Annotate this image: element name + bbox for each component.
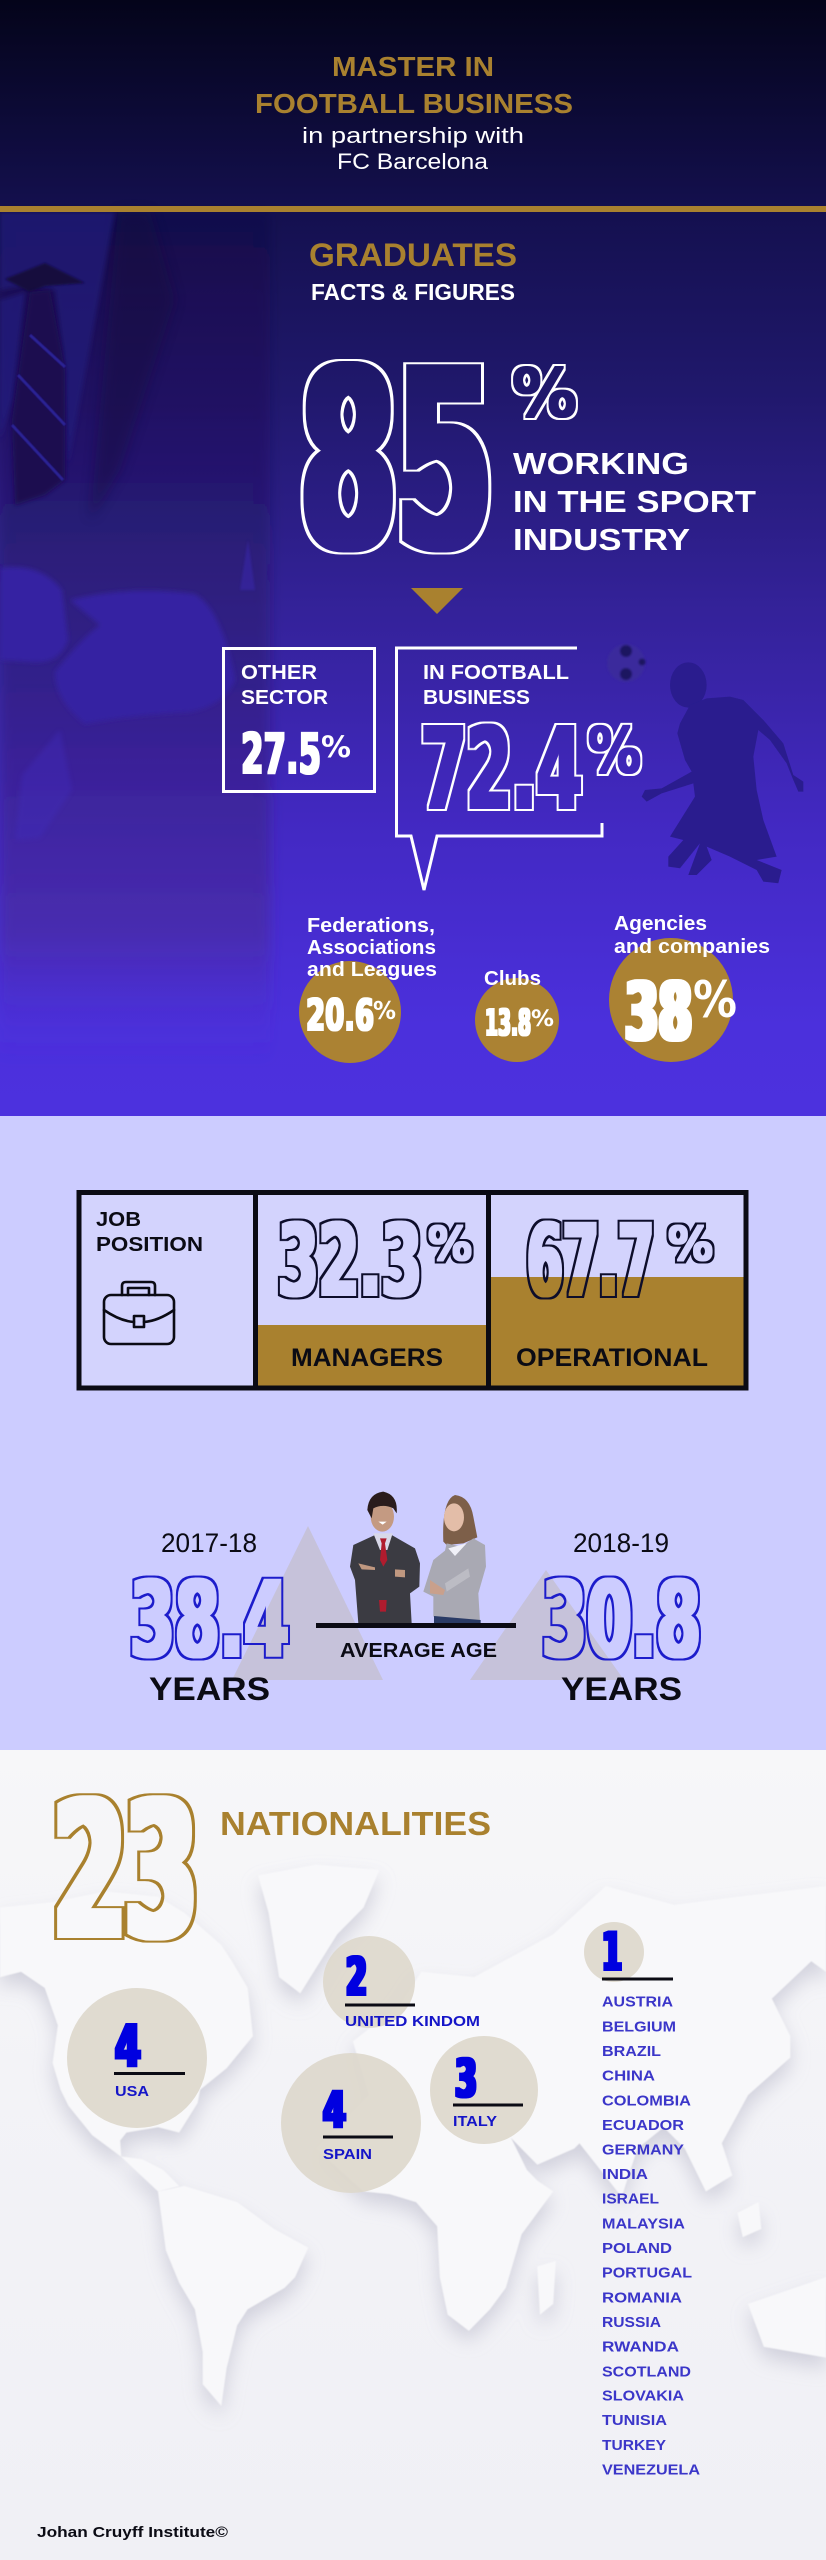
marker: usa [67,1988,207,2128]
soccer player silhouette [642,662,803,883]
list of countries: MALAYSIA [602,2215,685,2232]
stat: 2018-19 age: 2018-19 [573,1528,669,1558]
marker: one student each: 1 [602,1922,622,1983]
panel: other sector [224,648,374,792]
marker: united kingdom [323,1936,480,2030]
stat: clubs: % [531,1007,554,1032]
list of countries: ISRAEL [602,2191,659,2208]
footer credit: Johan Cruyff Institute© [37,2524,228,2541]
stat: agencies: 38 [625,966,692,1059]
stat: federations: and Leagues [307,959,437,981]
list of countries: GERMANY [602,2142,684,2159]
stat: clubs [475,968,559,1062]
stat: 2017-18 age: YEARS [149,1671,270,1707]
image: man and woman standing [350,1492,486,1623]
stat: federations [299,915,437,1063]
managers gold bar [258,1325,486,1386]
title: FOOTBALL BUSINESS [255,88,573,119]
panel: in football business callout: BUSINESS [423,687,530,709]
stat: federations: 20.6 [306,991,374,1041]
stat: agencies: and companies [614,936,770,958]
stat: clubs: Clubs [484,968,541,990]
marker: united kingdom: 2 [346,1947,367,2008]
world map [0,1865,826,2406]
panel: job position table: OPERATIONAL [516,1344,708,1372]
title: in partnership with [302,123,524,148]
panel: job position table: MANAGERS [291,1344,443,1372]
list of countries: POLAND [602,2240,672,2257]
woman [423,1495,486,1623]
panel: other sector: OTHER [241,662,318,684]
marker: spain: 4 [323,2081,346,2139]
title: MASTER IN [332,51,494,82]
panel: nationalities map background [0,1750,826,2560]
heading: graduates [309,237,517,305]
panel: other sector: 27.5 [241,722,321,786]
stat: agencies: % [693,971,737,1029]
panel: job position table: % [428,1217,472,1271]
panel: job position table: % [668,1217,713,1271]
marker: spain: SPAIN [323,2146,372,2163]
panel: job position table: 32.3 [278,1204,422,1319]
gold divider line [0,206,826,212]
list of countries: AUSTRIA [602,1994,673,2011]
marker: usa: 4 [115,2012,141,2080]
icon: briefcase [104,1282,174,1344]
stat: agencies: Agencies [614,913,707,935]
list of countries: COLOMBIA [602,2092,691,2109]
stat: 23 nationalities: 23 [54,1763,197,1981]
panel: job position table: 67.7 [527,1204,654,1319]
stat: average age [316,1623,516,1662]
list of countries: CHINA [602,2068,655,2085]
stat: federations: % [373,996,396,1025]
panel: in football business callout: IN FOOTBALL [423,662,569,684]
stat: 2018-19 age: 30.8 [542,1559,701,1681]
stat: 85 percent working in the sport industry: INDUSTRY [513,522,690,557]
stat: 2018-19 age: YEARS [561,1671,682,1707]
title [255,51,573,174]
panel: other sector: SECTOR [241,687,329,709]
marker: united kingdom: UNITED KINDOM [345,2013,480,2030]
marker: italy: 3 [455,2049,477,2110]
arrow: gold triangle down [411,588,463,614]
stat: federations: Federations, [307,915,435,937]
list of countries: RUSSIA [602,2314,661,2331]
list of countries: VENEZUELA [602,2462,700,2479]
stat: clubs: 13.8 [485,1003,531,1044]
stat: federations: Associations [307,937,436,959]
stat: 85 percent working in the sport industry: 85 [300,318,493,606]
stat: 2017-18 age: 2017-18 [161,1528,257,1558]
list of countries: TUNISIA [602,2412,667,2429]
panel: lavender job and age background [0,1116,826,1750]
marker: spain [281,2053,421,2193]
stat: agencies [609,913,770,1062]
panel: in football business callout [396,648,641,890]
list of countries: TURKEY [602,2437,666,2454]
panel: job position table: JOB [96,1209,141,1231]
list of countries: RWANDA [602,2339,679,2356]
list of countries: ROMANIA [602,2289,682,2306]
list of countries: PORTUGAL [602,2265,692,2282]
list of countries: INDIA [602,2166,648,2183]
panel: job position table: POSITION [96,1234,203,1256]
stat: 2017-18 age [130,1528,289,1707]
title: FC Barcelona [337,149,489,174]
stat: 85 percent working in the sport industry: IN THE SPORT [513,484,756,519]
man [350,1492,420,1623]
stat: 85 percent working in the sport industry: WORKING [513,446,689,481]
stat: 85 percent working in the sport industry: % [512,355,577,432]
panel: graduates dark header background [0,0,826,1116]
marker: one student each [584,1922,673,1983]
panel: job position table [79,1190,746,1390]
list of countries: BRAZIL [602,2043,661,2060]
background triangles [232,1526,624,1680]
stat: 2018-19 age [542,1528,701,1707]
heading: graduates: FACTS & FIGURES [311,279,515,305]
stat: 2017-18 age: 38.4 [130,1559,289,1681]
panel: other sector: % [321,730,351,764]
stat: 23 nationalities: NATIONALITIES [220,1805,491,1842]
heading: graduates: GRADUATES [309,237,517,273]
list of countries: BELGIUM [602,2018,676,2035]
stat: 23 nationalities [54,1763,491,1981]
operational gold bar [491,1277,745,1386]
marker: italy: ITALY [453,2113,497,2130]
list of countries: SLOVAKIA [602,2388,684,2404]
stat: average age: AVERAGE AGE [340,1640,497,1662]
marker: usa: USA [115,2083,149,2100]
list of countries: ECUADOR [602,2117,684,2134]
marker: italy [430,2036,538,2144]
panel: in football business callout: 72.4 [421,705,582,835]
soccer ball [607,644,646,682]
suit figure background [0,212,270,1062]
list of countries: SCOTLAND [602,2363,691,2380]
list of countries [602,1994,700,2479]
panel: in football business callout: % [588,714,641,787]
